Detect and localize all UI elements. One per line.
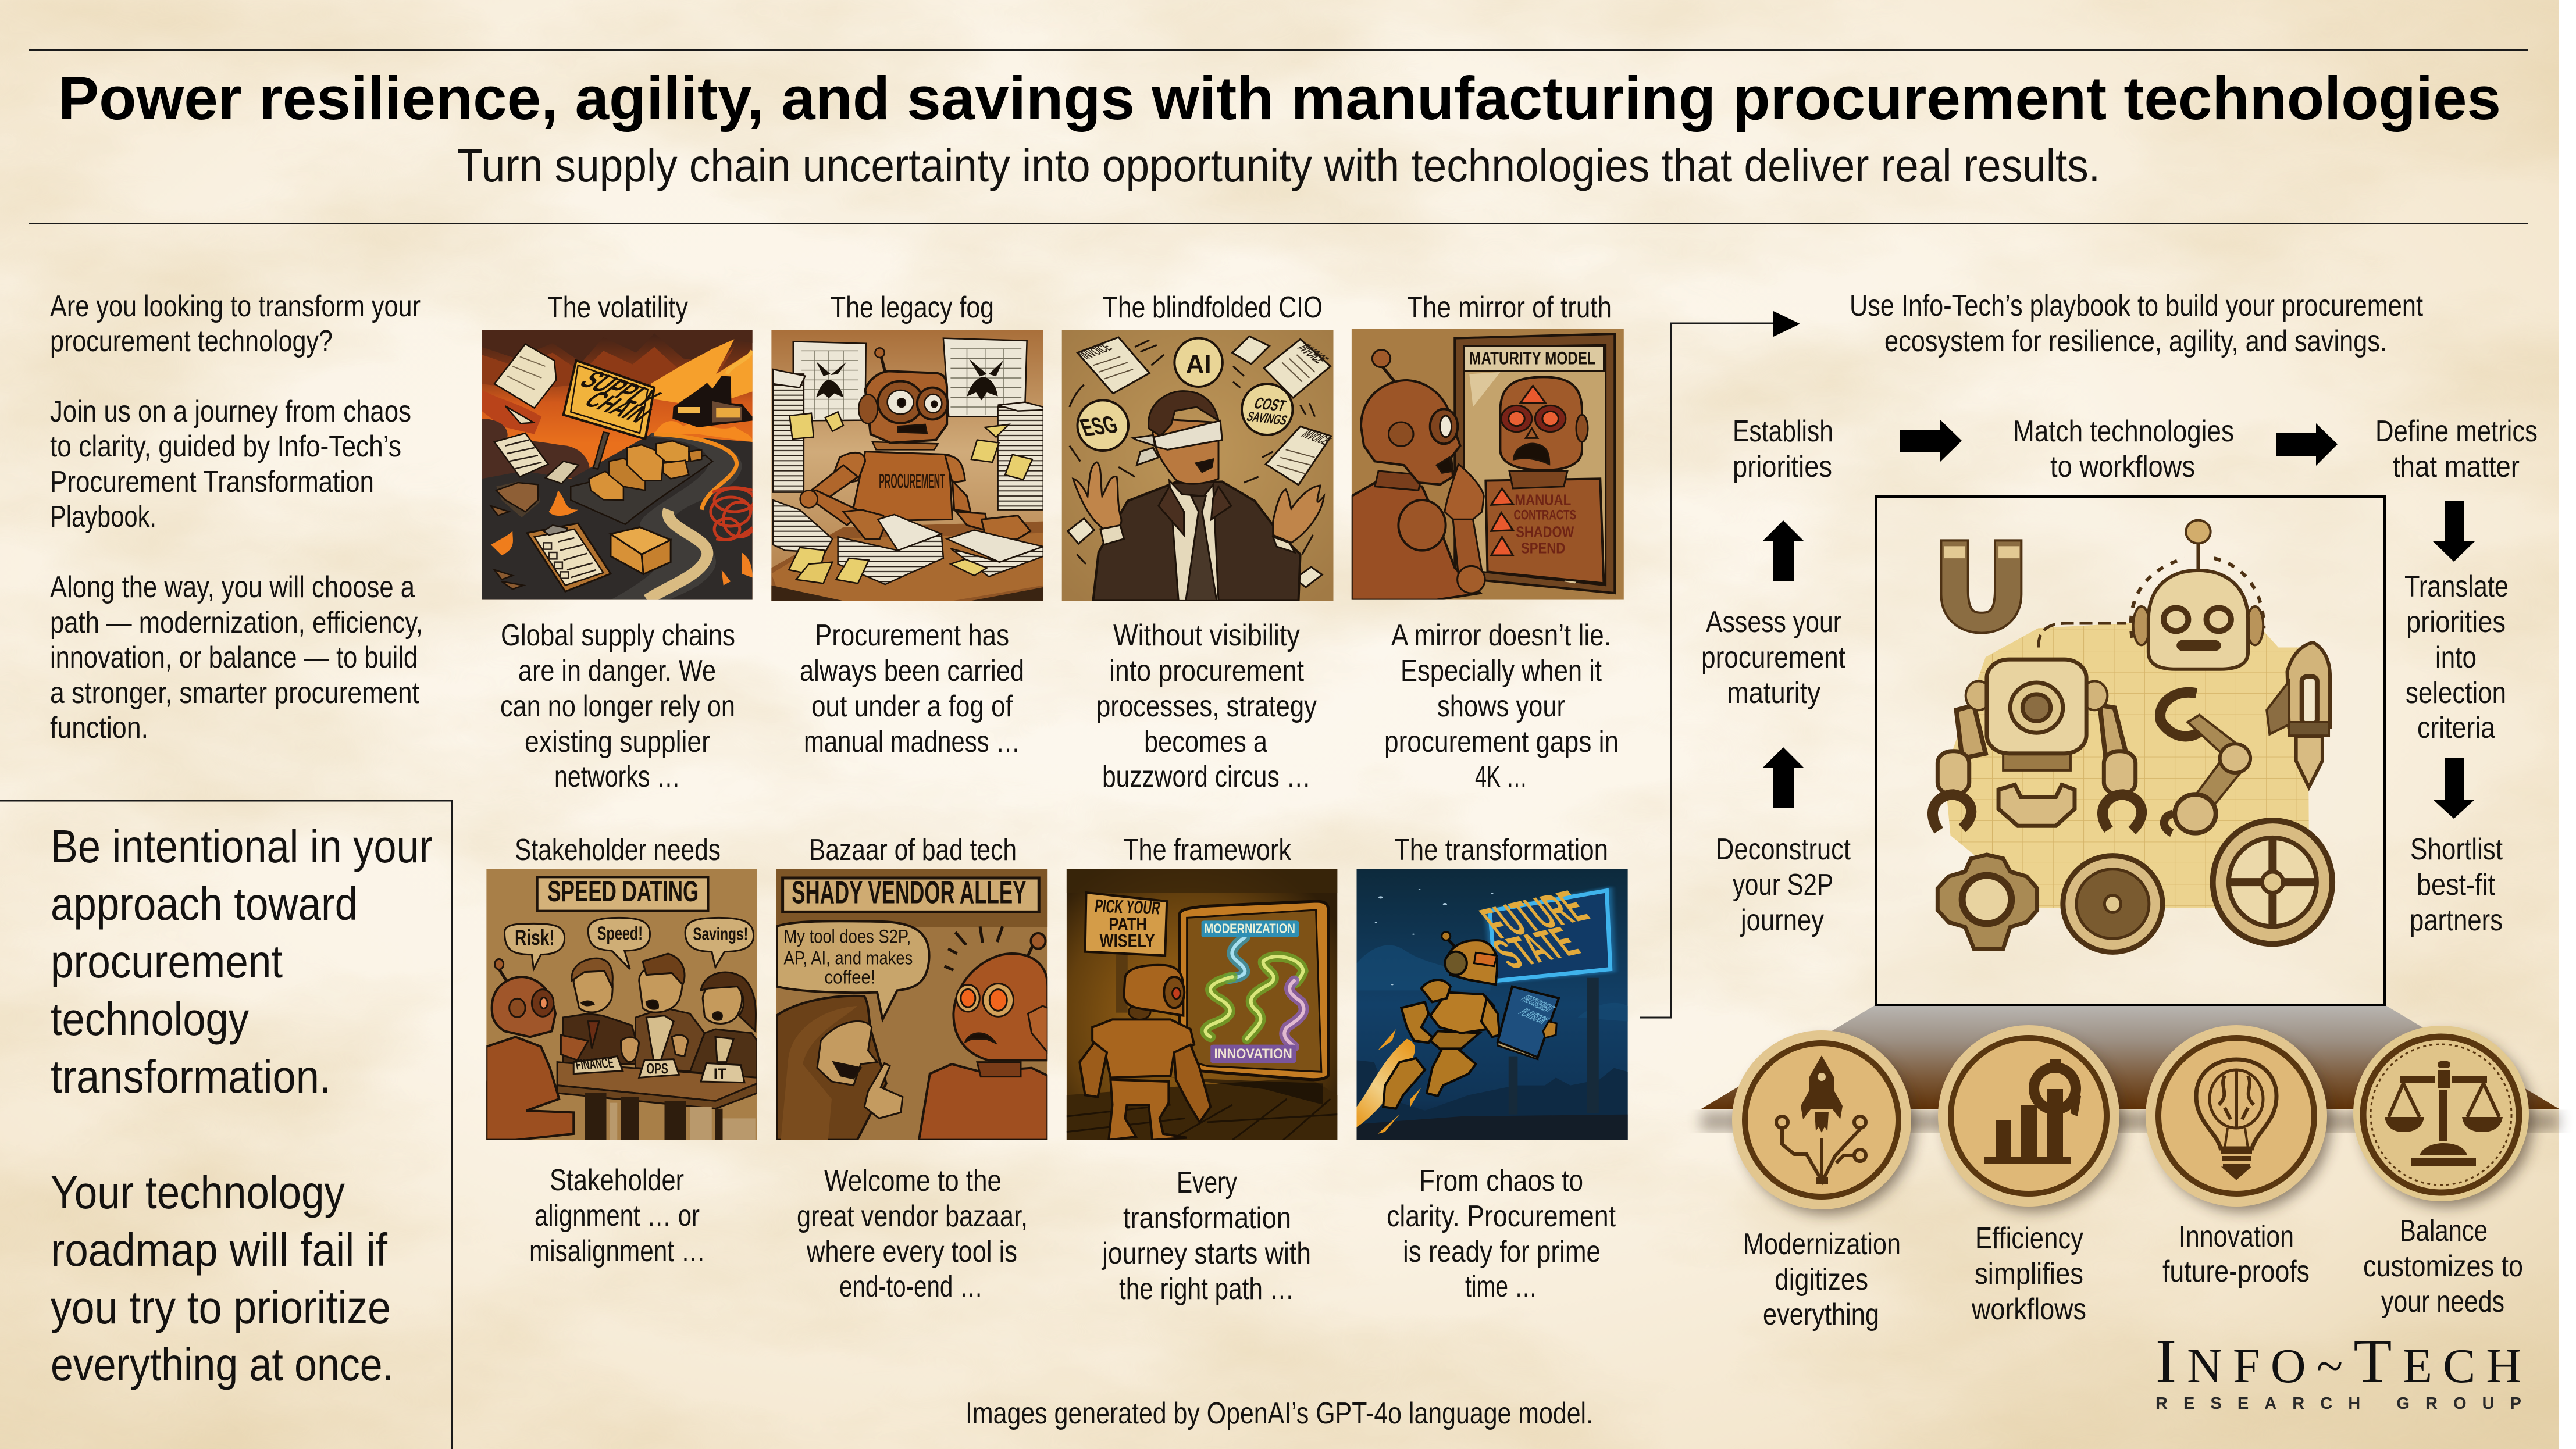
intro text: Are you looking to transform your	[50, 290, 421, 323]
text: MATURITY MODEL	[1469, 348, 1596, 369]
caption: the framework: Every	[1177, 1166, 1237, 1200]
caption: the blindfolded CIO: becomes a	[1144, 725, 1267, 759]
arrow: down 1	[2433, 501, 2475, 562]
callout: be intentional: Your technology	[51, 1166, 345, 1218]
step: match: Match technologies	[2013, 415, 2234, 448]
illustration: future state: PROCUREMENT	[1517, 993, 1559, 1015]
arrow: down 2	[2433, 758, 2475, 819]
caption: bazaar of bad tech: Welcome to the	[824, 1164, 1002, 1198]
caption: the legacy fog: out under a fog of	[811, 690, 1013, 723]
illustration: shady vendor alley: coffee!	[825, 967, 875, 988]
card: the transformation	[1356, 833, 1628, 1140]
illustration: robot in mirror: SPEND	[1521, 540, 1565, 557]
step: assess: procurement	[1701, 641, 1845, 674]
arrow: up 1	[1762, 747, 1804, 808]
step: translate	[2404, 570, 2509, 745]
card: the framework: The framework	[1123, 833, 1292, 867]
illustration: robot in mirror: SHADOW	[1516, 524, 1574, 540]
illustration: blindfolded executive	[1062, 330, 1335, 601]
caption: the volatility: can no longer rely on	[500, 690, 735, 723]
intro text: to clarity, guided by Info-Tech’s	[50, 430, 401, 463]
caption: the mirror of truth: Especially when it	[1401, 654, 1602, 688]
foundation band	[1701, 1005, 2559, 1131]
step: match	[2013, 415, 2234, 484]
illustration: blindfolded executive: ESG	[1076, 411, 1122, 441]
step: deconstruct	[1716, 833, 1851, 937]
caption: bazaar of bad tech: great vendor bazaar,	[797, 1200, 1028, 1233]
text: FUTURE	[1470, 881, 1599, 948]
label: innovation	[2162, 1220, 2310, 1289]
coin: modernization	[1732, 1030, 1915, 1214]
caption: the framework	[1101, 1166, 1311, 1306]
intro text: path — modernization, efficiency,	[50, 606, 423, 640]
illustration: robot parts	[1933, 520, 2332, 952]
illustration: speed dating	[486, 869, 757, 1140]
caption: the volatility: Global supply chains	[501, 619, 735, 652]
illustration: shady vendor alley	[776, 869, 1047, 1140]
caption: the transformation: is ready for prime	[1403, 1235, 1601, 1269]
illustration: pick your path	[1067, 869, 1337, 1140]
caption: the blindfolded CIO: into procurement	[1109, 654, 1304, 688]
card: the legacy fog	[771, 291, 1043, 601]
step: define	[2375, 415, 2538, 484]
illustration: speed dating: FINANCE	[574, 1054, 615, 1073]
illustration: speed dating: Speed!	[597, 923, 643, 944]
callout: be intentional: approach toward	[51, 878, 358, 930]
step: translate: into	[2435, 641, 2477, 674]
callout: be intentional: technology	[51, 993, 249, 1045]
text: INVOICE	[1298, 428, 1335, 447]
intro text: Procurement Transformation	[50, 465, 374, 499]
intro text: innovation, or balance — to build	[50, 641, 418, 674]
label: modernization: everything	[1763, 1298, 1879, 1332]
step: assess: maturity	[1727, 676, 1820, 710]
card: the blindfolded CIO	[1062, 291, 1335, 601]
card: the legacy fog: The legacy fog	[831, 291, 994, 324]
step: assess	[1701, 605, 1845, 710]
caption: bazaar of bad tech: where every tool is	[806, 1235, 1017, 1269]
illustration: robot buried in paper	[771, 330, 1043, 601]
illustration: blindfolded executive: COST	[1252, 394, 1289, 415]
step: deconstruct: journey	[1740, 904, 1824, 937]
step: translate: criteria	[2417, 711, 2495, 745]
card: the volatility	[482, 291, 756, 600]
coin: efficiency	[1938, 1025, 2123, 1211]
card: bazaar of bad tech	[776, 833, 1047, 1140]
step: translate: selection	[2406, 676, 2506, 710]
illustration: blindfolded executive: INVOICE	[1075, 341, 1116, 362]
caption: the mirror of truth: 4K …	[1475, 760, 1527, 794]
label: efficiency: simplifies	[1975, 1257, 2083, 1291]
caption: the framework: the right path …	[1119, 1272, 1294, 1306]
label: balance: Balance	[2400, 1214, 2488, 1248]
callout: be intentional	[0, 801, 452, 1449]
card: the volatility: The volatility	[547, 291, 688, 324]
caption: the legacy fog: Procurement has	[815, 619, 1009, 652]
caption: the mirror of truth	[1384, 619, 1619, 794]
heading: playbook	[1850, 289, 2423, 358]
callout: be intentional: you try to prioritize	[51, 1282, 391, 1333]
arrow: connector to playbook	[1640, 311, 1800, 1018]
step: establish	[1733, 415, 1833, 484]
step: deconstruct: Deconstruct	[1716, 833, 1851, 866]
illustration: robot in mirror	[1352, 329, 1624, 600]
step: translate: priorities	[2406, 605, 2506, 639]
text: SHADY VENDOR ALLEY	[792, 874, 1026, 910]
captions row 2	[529, 1164, 1616, 1306]
step: establish: priorities	[1733, 450, 1832, 484]
illustration: blindfolded executive: SAVINGS	[1245, 409, 1289, 428]
step: translate: Translate	[2404, 570, 2509, 604]
label: efficiency: Efficiency	[1975, 1222, 2083, 1255]
icon: scales	[2385, 1061, 2503, 1166]
caption: the volatility: existing supplier	[525, 725, 710, 759]
intro text: Along the way, you will choose a	[50, 570, 415, 604]
step: deconstruct: your S2P	[1733, 868, 1833, 902]
intro text: Join us on a journey from chaos	[50, 395, 411, 429]
illustration: blindfolded executive: INVOICE	[1292, 342, 1333, 365]
arrow: right 2	[2276, 423, 2338, 466]
card: stakeholder needs	[486, 833, 757, 1140]
caption: the volatility: are in danger. We	[518, 654, 716, 688]
text: Savings!	[693, 924, 748, 944]
caption: the framework: journey starts with	[1101, 1237, 1311, 1270]
illustration: speed dating: OPS	[646, 1061, 668, 1077]
intro text: Playbook.	[50, 500, 156, 534]
caption: the transformation: From chaos to	[1419, 1164, 1583, 1198]
heading: playbook: ecosystem for resilience, agility, and savings.	[1884, 324, 2387, 358]
path labels	[1743, 1214, 2523, 1332]
callout: be intentional: procurement	[51, 936, 283, 987]
illustration: future state	[1356, 869, 1628, 1140]
caption: stakeholder needs	[529, 1164, 706, 1268]
caption: bazaar of bad tech: end-to-end …	[839, 1270, 983, 1304]
illustration: speed dating: SPEED DATING	[547, 875, 699, 908]
caption: the transformation: time …	[1465, 1270, 1537, 1304]
illustration: robot buried in paper: PROCUREMENT	[879, 470, 945, 492]
step: shortlist: partners	[2410, 904, 2503, 937]
illustration: robot in mirror: MANUAL	[1515, 492, 1571, 508]
intro text	[50, 290, 423, 745]
title: Power resilience, agility, and savings with manufacturing procurement technologies	[58, 65, 2501, 133]
illustration: speed dating: IT	[714, 1065, 726, 1082]
image credit: Images generated by OpenAI’s GPT-4o language model.	[965, 1397, 1593, 1430]
step: shortlist: Shortlist	[2410, 833, 2503, 866]
caption: the legacy fog: manual madness …	[804, 725, 1020, 759]
caption: the legacy fog	[800, 619, 1024, 759]
label: efficiency	[1971, 1222, 2086, 1326]
card: stakeholder needs: Stakeholder needs	[515, 833, 721, 867]
label: balance: customizes to	[2363, 1250, 2523, 1283]
subtitle: Turn supply chain uncertainty into opportunity with technologies that deliver real results.	[457, 140, 2100, 191]
illustration: supply chain on fire	[482, 330, 756, 600]
caption: bazaar of bad tech	[797, 1164, 1028, 1304]
label: modernization	[1743, 1227, 1901, 1332]
caption: the mirror of truth: shows your	[1437, 690, 1565, 723]
caption: stakeholder needs: Stakeholder	[550, 1164, 684, 1197]
caption: the blindfolded CIO: Without visibility	[1113, 619, 1300, 652]
illustration: speed dating: Risk!	[515, 926, 555, 950]
logo: Info-Tech Research Group: RESEARCH GROUP	[2155, 1394, 2521, 1413]
illustration: robot in mirror: CONTRACTS	[1513, 506, 1576, 523]
intro text: procurement technology?	[50, 324, 333, 358]
caption: the legacy fog: always been carried	[800, 654, 1024, 688]
step: establish: Establish	[1733, 415, 1833, 448]
step: shortlist: best-fit	[2417, 868, 2495, 902]
arrow: up 2	[1762, 520, 1804, 581]
caption: the blindfolded CIO	[1096, 619, 1317, 794]
illustration: future state: STATE	[1483, 918, 1589, 977]
caption: the framework: transformation	[1123, 1201, 1291, 1235]
callout: be intentional: Be intentional in your	[51, 820, 433, 872]
step: define: that matter	[2393, 450, 2520, 484]
caption: the transformation: clarity. Procurement	[1387, 1200, 1616, 1233]
label: balance: your needs	[2381, 1285, 2504, 1319]
caption: stakeholder needs: alignment … or	[535, 1199, 700, 1233]
card: the transformation: The transformation	[1394, 833, 1608, 867]
coin: balance	[2353, 1026, 2533, 1207]
icon: brain light bulb	[2196, 1059, 2276, 1177]
caption: stakeholder needs: misalignment …	[529, 1234, 706, 1268]
intro text: function.	[50, 711, 148, 745]
caption: the blindfolded CIO: processes, strategy	[1096, 690, 1317, 723]
card: the blindfolded CIO: The blindfolded CIO	[1103, 291, 1323, 324]
caption: the mirror of truth: A mirror doesn’t lie.	[1391, 619, 1611, 652]
illustration: pick your path: PATH	[1109, 914, 1147, 934]
caption: the mirror of truth: procurement gaps in	[1384, 725, 1619, 759]
callout: be intentional: everything at once.	[51, 1339, 394, 1390]
label: efficiency: workflows	[1971, 1293, 2086, 1326]
label: modernization: digitizes	[1775, 1263, 1868, 1297]
step: define: Define metrics	[2375, 415, 2538, 448]
illustration: supply chain on fire: SUPPLY	[572, 366, 668, 412]
caption: the transformation	[1387, 1164, 1616, 1304]
icon: bars and gear	[1984, 1059, 2081, 1164]
caption: the blindfolded CIO: buzzword circus …	[1102, 760, 1311, 794]
illustration: blindfolded executive: AI	[1186, 350, 1212, 379]
label: modernization: Modernization	[1743, 1227, 1901, 1261]
illustration: pick your path: WISELY	[1100, 930, 1155, 951]
callout: be intentional: transformation.	[51, 1051, 331, 1102]
panel: robot ecosystem illustration	[1876, 497, 2385, 1005]
illustration: pick your path: INNOVATION	[1214, 1045, 1292, 1061]
label: innovation: future-proofs	[2162, 1255, 2310, 1289]
callout: be intentional: roadmap will fail if	[51, 1224, 388, 1276]
icon: rocket and circuit	[1776, 1055, 1866, 1184]
step: shortlist	[2410, 833, 2503, 937]
illustration: future state: PLAYBOOK	[1515, 1007, 1553, 1026]
caption: the volatility: networks …	[554, 760, 680, 794]
arrow: right 1	[1900, 420, 1962, 462]
intro text: a stronger, smarter procurement	[50, 676, 419, 710]
label: innovation: Innovation	[2179, 1220, 2294, 1254]
title block	[29, 49, 2528, 224]
card: bazaar of bad tech: Bazaar of bad tech	[809, 833, 1017, 867]
card: the mirror of truth: The mirror of truth	[1407, 291, 1612, 324]
captions row 1	[500, 619, 1619, 794]
illustration: supply chain on fire: CHAIN	[577, 387, 658, 427]
label: balance	[2363, 1214, 2523, 1319]
step: assess: Assess your	[1706, 605, 1841, 639]
logo: Info-Tech Research Group: INFO~TECH	[2155, 1327, 2521, 1396]
illustration: shady vendor alley: AP, AI, and makes	[784, 948, 913, 969]
illustration: pick your path: PICK YOUR	[1093, 895, 1161, 919]
coin: innovation	[2146, 1025, 2331, 1211]
caption: the volatility	[500, 619, 735, 794]
card: the framework	[1067, 833, 1337, 1140]
illustration: shady vendor alley: My tool does S2P,	[784, 926, 911, 947]
heading: playbook: Use Info-Tech’s playbook to build your procurement	[1850, 289, 2423, 323]
illustration: pick your path: MODERNIZATION	[1205, 920, 1295, 936]
card: the mirror of truth	[1352, 291, 1624, 600]
step: match: to workflows	[2050, 450, 2195, 484]
